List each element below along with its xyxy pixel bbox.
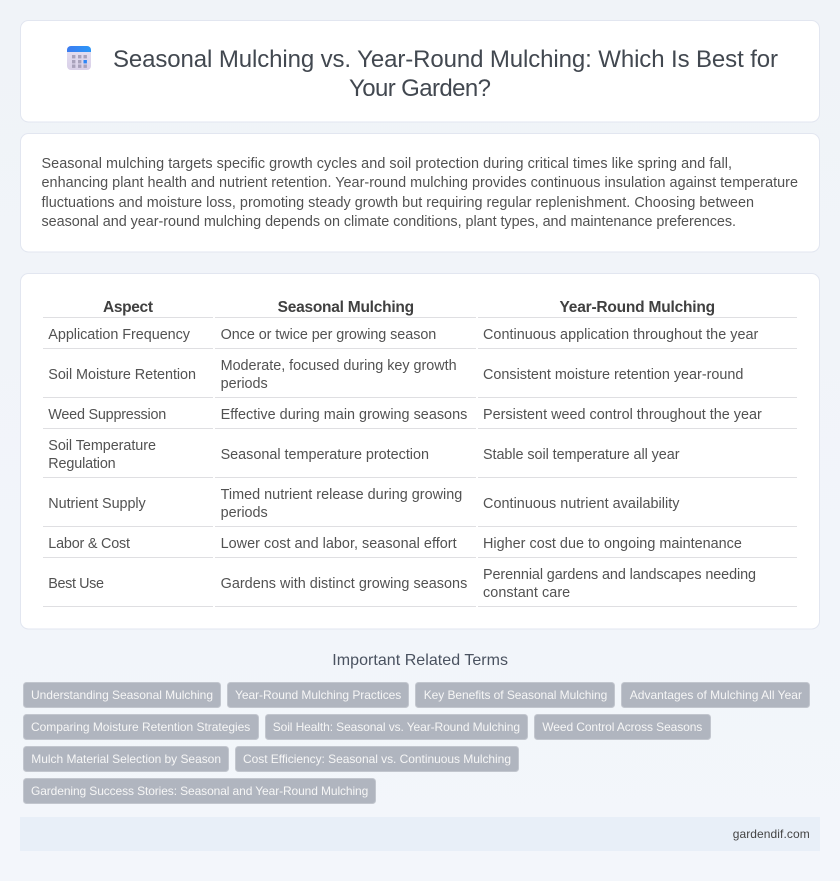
row: Weed Suppression: [48, 407, 762, 423]
footer bar: [20, 817, 820, 851]
row: Best Use: [48, 567, 756, 601]
row: Best Use: Perennial gardens and landscapes needing: [483, 567, 756, 583]
related terms heading: Important Related Terms: [332, 652, 508, 669]
tag: Comparing Moisture Retention Strategies: [24, 714, 258, 740]
tag: Year-Round Mulching Practices: Year-Round Mulching Practices: [235, 688, 401, 702]
tag: Gardening Success Stories: Gardening Success Stories: Seasonal and Year-Round Mulching: [31, 784, 368, 798]
panel: comparison table card: [20, 274, 820, 629]
related term tags: [24, 682, 810, 804]
tag: Weed Control Across Seasons: [534, 714, 710, 740]
tag: Comparing Moisture Retention Strategies: Comparing Moisture Retention Strategies: [31, 720, 250, 734]
panel: intro text card: [20, 134, 820, 252]
row: Soil Moisture Retention: Soil Moisture Retention: [48, 367, 196, 383]
row: Weed Suppression: Weed Suppression: [48, 407, 166, 423]
row: Soil Moisture Retention: Moderate, focused during key growth: [221, 358, 457, 374]
tag: Year-Round Mulching Practices: [228, 682, 408, 708]
row: Best Use: Best Use: [48, 576, 104, 592]
tag: Advantages of Mulching All Year: [622, 682, 810, 708]
title: Your Garden?: [349, 75, 491, 102]
row: Application Frequency: Once or twice per growing season: [221, 327, 436, 343]
row: Labor and Cost: Higher cost due to ongoing maintenance: [483, 536, 742, 552]
row: Nutrient Supply: Nutrient Supply: [48, 496, 146, 512]
table header row: [103, 299, 715, 316]
row: Labor and Cost: [48, 536, 742, 552]
row: Best Use: Gardens with distinct growing seasons: [221, 576, 467, 592]
row: Weed Suppression: Persistent weed control throughout the year: [483, 407, 762, 423]
tag: Understanding Seasonal Mulching: Understanding Seasonal Mulching: [31, 688, 213, 702]
tag: Cost Efficiency: [236, 746, 518, 772]
title: [113, 46, 778, 102]
intro paragraph: seasonal and year-round mulching depends on climate conditions, plant types, and maintenance preferences.: [42, 214, 736, 230]
tag: Understanding Seasonal Mulching: [24, 682, 220, 708]
row: Labor and Cost: Lower cost and labor, seasonal effort: [221, 536, 457, 552]
tag: Weed Control Across Seasons: Weed Control Across Seasons: [542, 720, 702, 734]
row: Soil Temperature Regulation: Stable soil temperature all year: [483, 447, 680, 463]
table header row: Aspect: [103, 299, 153, 316]
row: Application Frequency: Continuous application throughout the year: [483, 327, 759, 343]
tag: Cost Efficiency: Cost Efficiency: Seasonal vs. Continuous Mulching: [243, 752, 511, 766]
icon: calendar: [67, 46, 91, 70]
table header row: Year-Round Mulching: [560, 299, 715, 316]
tag: Advantages of Mulching All Year: Advantages of Mulching All Year: [630, 688, 802, 702]
row: Application Frequency: Application Frequency: [48, 327, 191, 343]
tag: Key Benefits of Seasonal Mulching: [416, 682, 614, 708]
table header row: Seasonal Mulching: [278, 299, 414, 316]
tag: Key Benefits of Seasonal Mulching: Key Benefits of Seasonal Mulching: [424, 688, 607, 702]
row: Soil Temperature Regulation: Soil Temperature: [48, 438, 156, 454]
row: Best Use: constant care: [483, 585, 570, 601]
intro paragraph: Seasonal mulching targets specific growth cycles and soil protection during critical times like spring and fall,: [42, 156, 732, 172]
panel: title card: [20, 20, 820, 122]
tag: Mulch Material Selection by Season: [24, 746, 228, 772]
row: Nutrient Supply: [48, 487, 680, 521]
row: Labor and Cost: Labor & Cost: [48, 536, 130, 552]
intro paragraph: fluctuations and moisture loss, promoting steady growth but requiring regular replenishment. Choosing between: [42, 195, 754, 211]
row: Soil Temperature Regulation: Regulation: [48, 456, 116, 472]
title: Seasonal Mulching vs. Year-Round Mulching: Which Is Best for: [113, 46, 778, 73]
row: Soil Moisture Retention: Consistent moisture retention year-round: [483, 367, 743, 383]
row: Soil Temperature Regulation: Seasonal temperature protection: [221, 447, 429, 463]
row: Weed Suppression: Effective during main growing seasons: [221, 407, 467, 423]
row: Soil Temperature Regulation: [48, 438, 680, 472]
intro paragraph: [42, 156, 798, 230]
row: Soil Moisture Retention: periods: [221, 376, 268, 392]
tag: Mulch Material Selection by Season: Mulch Material Selection by Season: [31, 752, 221, 766]
tag: Soil Health: Soil Health: Seasonal vs. Year-Round Mulching: [273, 720, 520, 734]
row: Nutrient Supply: periods: [221, 505, 268, 521]
row: Soil Moisture Retention: [48, 358, 743, 392]
row: Nutrient Supply: Continuous nutrient availability: [483, 496, 680, 512]
comparison table: [43, 299, 797, 607]
row: Application Frequency: [48, 327, 759, 343]
footer source text: gardendif.com: [733, 827, 810, 841]
tag: Soil Health: [266, 714, 528, 740]
row: Nutrient Supply: Timed nutrient release during growing: [221, 487, 462, 503]
intro paragraph: enhancing plant health and nutrient retention. Year-round mulching provides continuous insulation against temperature: [42, 175, 798, 191]
tag: Gardening Success Stories: [24, 778, 376, 804]
